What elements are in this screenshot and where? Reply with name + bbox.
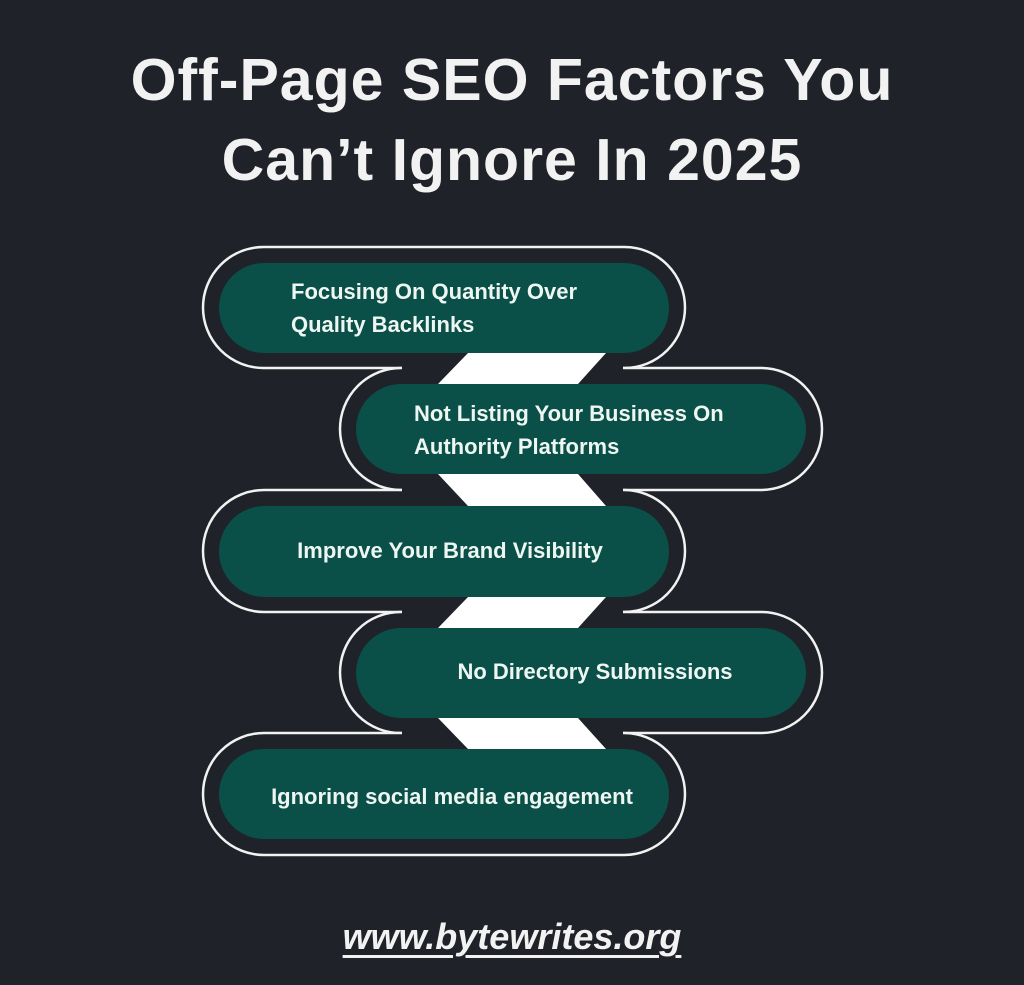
item 2: Not Listing Your Business On [414,401,724,426]
item 4 [356,628,806,718]
item 3 [219,506,669,597]
title: Off-Page SEO Factors You [131,47,893,113]
item 1 [219,263,669,353]
title [131,47,893,193]
title: Can’t Ignore In 2025 [222,127,802,193]
item 1: Quality Backlinks [291,312,474,337]
item 5 [219,749,669,839]
item 1: Focusing On Quantity Over [291,279,577,304]
item 2: Authority Platforms [414,434,619,459]
footer url: www.bytewrites.org [343,916,681,957]
item 4: No Directory Submissions [457,659,733,684]
item 3: Improve Your Brand Visibility [297,538,604,563]
item 5: Ignoring social media engagement [271,784,634,809]
item 2 [356,384,806,474]
connectors [438,353,606,749]
